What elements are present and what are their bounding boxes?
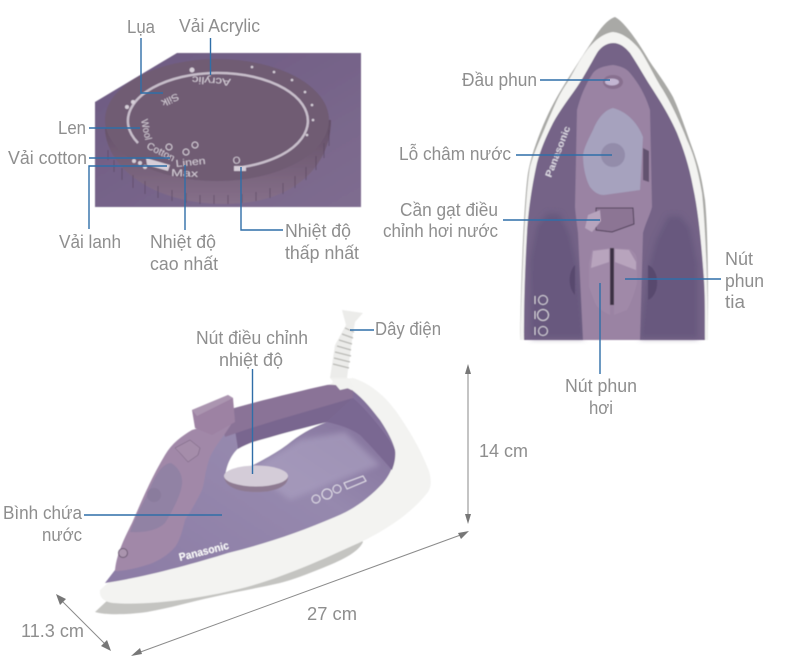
label: Cần gạt điều chỉnh hơi nước	[383, 200, 498, 241]
dial knob: Linen	[175, 156, 206, 170]
lever button	[175, 440, 200, 462]
label: Cần gạt điều chỉnh hơi nước: chỉnh hơi nước	[383, 221, 498, 241]
dial	[224, 466, 288, 492]
label: 14 cm: 14 cm	[479, 441, 528, 461]
right inner shade	[327, 398, 395, 470]
label: Nhiệt độ cao nhất	[150, 232, 218, 274]
spray buttons	[589, 248, 637, 315]
label: Nút phun tia: tia	[725, 292, 746, 312]
label: Nút phun tia	[725, 249, 764, 312]
dark side lobes	[530, 213, 698, 338]
steam lever	[585, 208, 634, 232]
label: 27 cm: 27 cm	[307, 604, 357, 624]
indicator icons	[312, 476, 366, 503]
label: Nút phun hơi	[565, 376, 637, 418]
label: Nút phun hơi: hơi	[589, 398, 613, 418]
dimension arrow: height	[465, 364, 471, 524]
white body	[100, 378, 431, 604]
label: Nhiệt độ cao nhất: cao nhất	[150, 254, 218, 274]
label: Nhiệt độ thấp nhất: thấp nhất	[285, 243, 359, 263]
nozzle	[603, 75, 623, 89]
filler cap	[583, 108, 643, 195]
label: Vải cotton: Vải cotton	[8, 148, 87, 168]
dimension arrow: width	[56, 594, 111, 651]
safety icons	[535, 296, 548, 336]
center strip	[575, 65, 652, 340]
iron side view	[95, 310, 431, 614]
dial knob: Wool	[138, 118, 153, 141]
dial knob: O	[232, 155, 241, 167]
brand name: Panasonic	[544, 125, 573, 179]
label: Nút phun tia: phun	[725, 271, 764, 291]
dial scale markings	[125, 66, 314, 171]
label: Cần gạt điều chỉnh hơi nước: Cần gạt điều	[400, 200, 498, 220]
handle top	[220, 385, 353, 437]
temperature thumb button	[192, 395, 235, 435]
label: Nút điều chỉnh nhiệt độ	[196, 328, 308, 370]
label: Lụa: Lụa	[127, 17, 156, 37]
label: Nhiệt độ thấp nhất	[285, 221, 359, 263]
soleplate	[95, 530, 363, 614]
label: Nhiệt độ thấp nhất: Nhiệt độ	[285, 221, 351, 241]
nozzle button	[118, 548, 128, 558]
dial knob: Acrylic	[192, 73, 231, 87]
cord	[330, 310, 363, 390]
label: Len: Len	[58, 118, 86, 138]
label: Dây điện: Dây điện	[375, 319, 441, 339]
side vents	[570, 265, 657, 300]
handle opening	[225, 422, 327, 478]
handle underside	[235, 398, 353, 449]
tank highlight	[250, 432, 380, 500]
dial knob: Max	[171, 168, 198, 180]
dial knob: Silk	[158, 90, 180, 108]
window	[130, 463, 182, 532]
dial photo panel	[95, 53, 361, 207]
label: Nút điều chỉnh nhiệt độ: Nút điều chỉnh	[196, 328, 308, 348]
iron top view	[520, 17, 708, 340]
dial knob: Cotton	[145, 141, 176, 164]
dimension arrow: length	[131, 531, 469, 656]
label: Bình chứa nước: Bình chứa	[3, 503, 83, 523]
front panel	[115, 417, 235, 571]
label: Vải lanh: Vải lanh	[59, 232, 121, 252]
label: Nút phun hơi: Nút phun	[565, 376, 637, 396]
dial knob	[105, 59, 331, 204]
label: Bình chứa nước: nước	[42, 525, 82, 545]
label: Lỗ châm nước: Lỗ châm nước	[399, 143, 511, 164]
label: Nút điều chỉnh nhiệt độ: nhiệt độ	[219, 350, 283, 370]
callout lines	[84, 38, 721, 515]
label: Nút phun tia: Nút	[725, 249, 753, 269]
brand name: Panasonic	[178, 540, 230, 564]
label: Nhiệt độ cao nhất: Nhiệt độ	[150, 232, 216, 252]
label: Đầu phun: Đầu phun	[462, 70, 537, 90]
label: Vải Acrylic: Vải Acrylic	[179, 16, 260, 36]
label: 11.3 cm: 11.3 cm	[21, 621, 84, 641]
water tank body	[105, 390, 395, 583]
label: Bình chứa nước	[3, 503, 83, 545]
